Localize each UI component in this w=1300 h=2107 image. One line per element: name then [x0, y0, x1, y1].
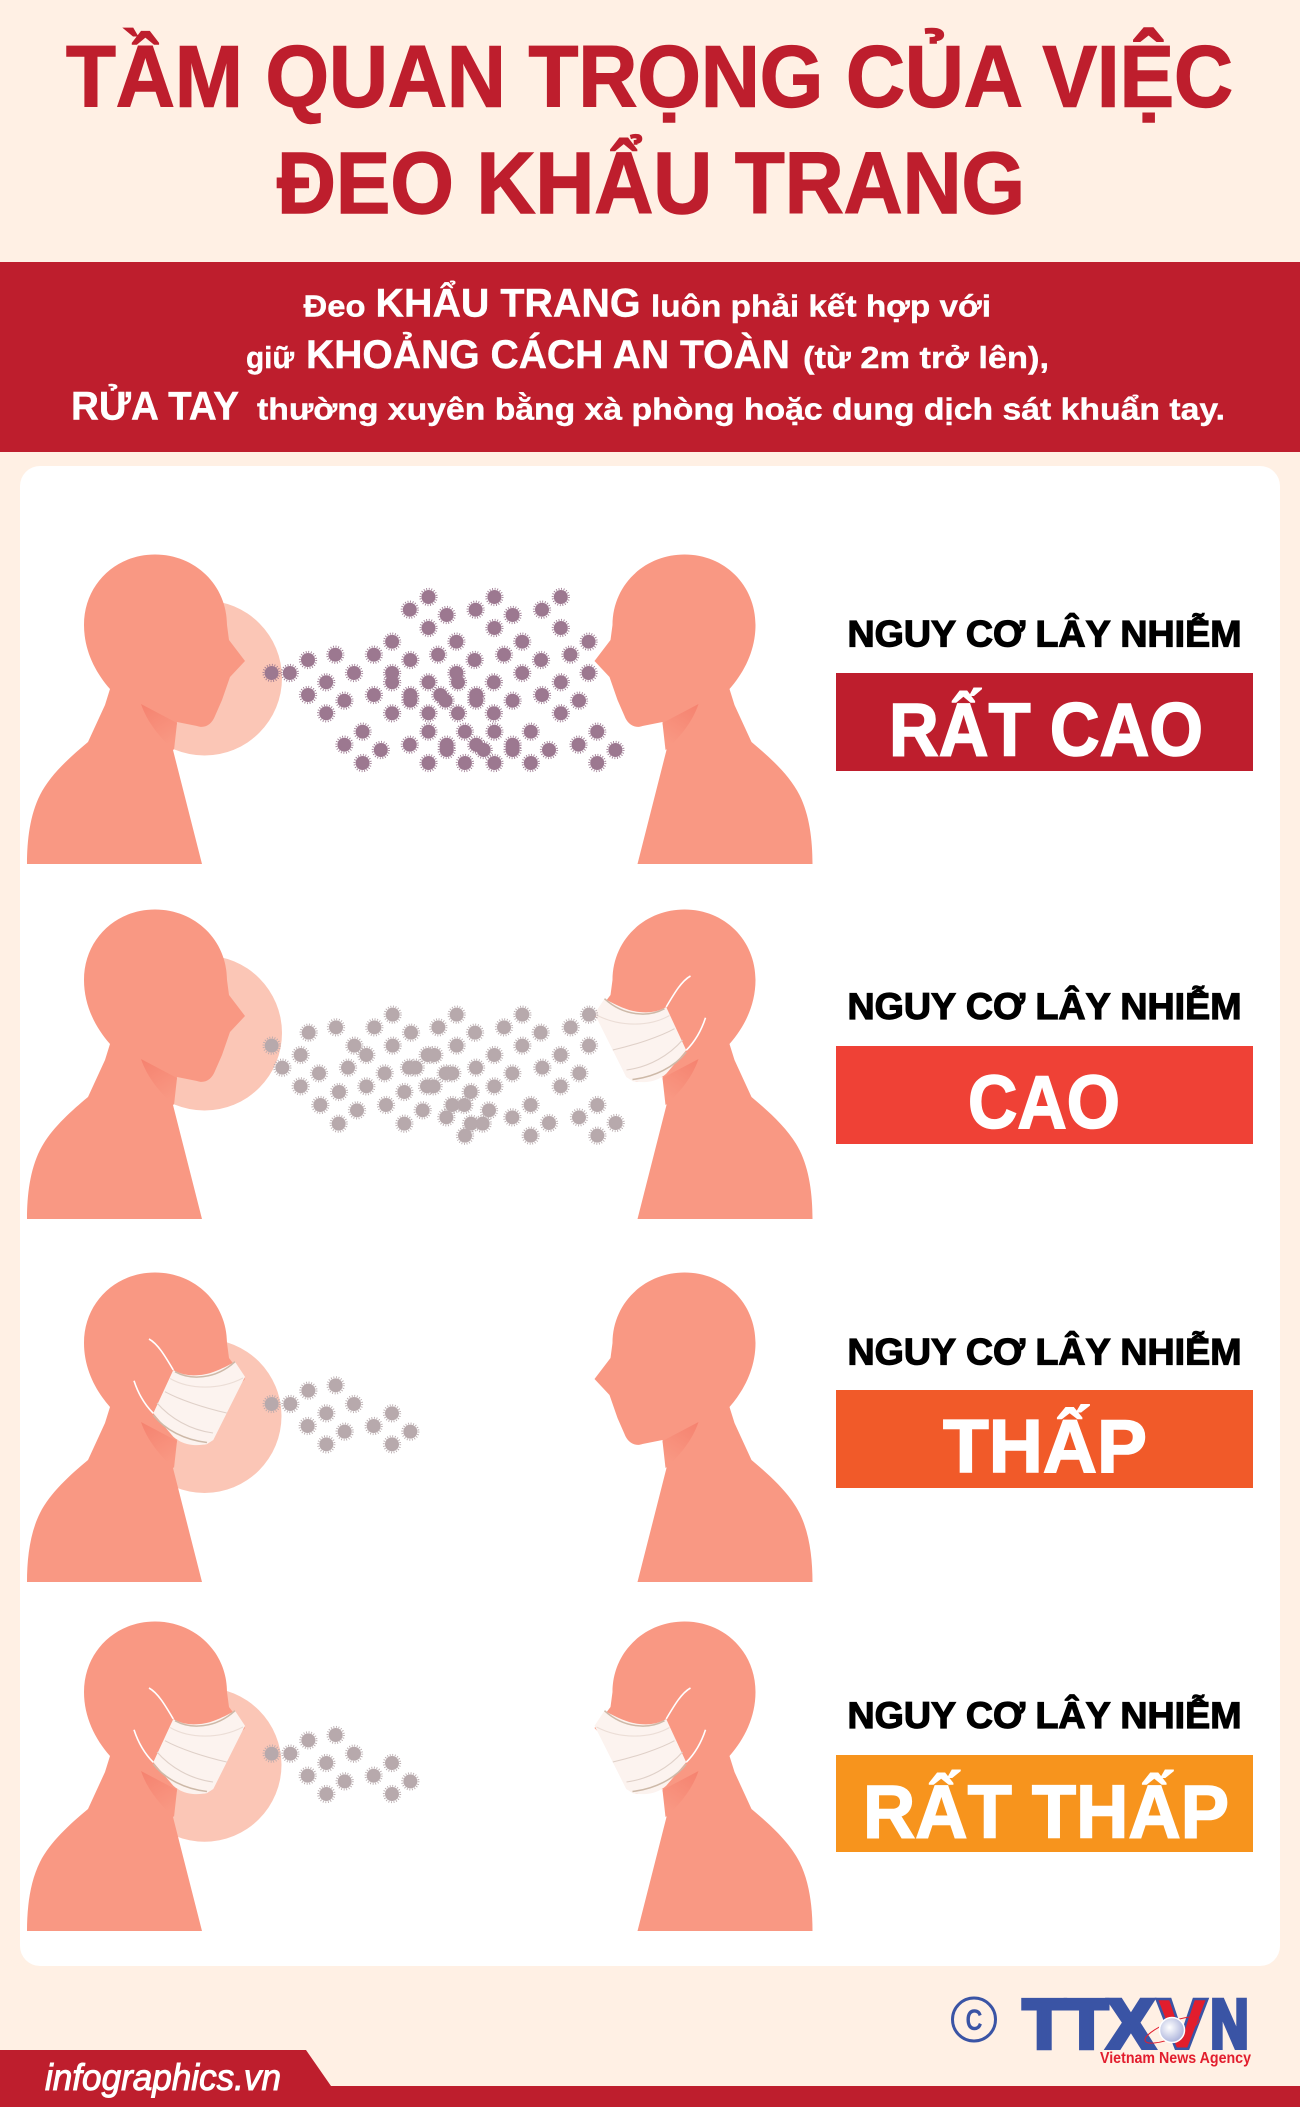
- footer bar: [0, 2050, 1300, 2107]
- right person with mask: [594, 910, 812, 1219]
- copyright mark: [952, 1998, 996, 2041]
- banner: key message: luôn phải kết hợp với: [651, 288, 991, 324]
- banner: key message: thường xuyên bằng xà phòng hoặc dung dịch sát khuẩn tay.: [257, 390, 1225, 426]
- virus cloud dense: [263, 589, 624, 771]
- banner: key message: KHẨU TRANG: [376, 278, 640, 326]
- banner: key message: RỬA TAY: [71, 382, 239, 428]
- row 4: both masked, very low risk: [27, 1622, 1253, 1931]
- right person with mask: [594, 1622, 812, 1931]
- risk box: very high: [836, 673, 1253, 772]
- footer site name: infographics.vn: [45, 2057, 281, 2098]
- virus cloud small: [263, 1727, 419, 1802]
- title: TẦM QUAN TRỌNG CỦA VIỆC: [66, 28, 1233, 126]
- wordmark: [1023, 1986, 1248, 2062]
- banner: key message: Đeo: [304, 288, 366, 324]
- breath circle: [127, 600, 282, 756]
- title: ĐEO KHẨU TRANG: [277, 135, 1025, 232]
- row 3: source masked, low risk: [27, 1272, 1253, 1582]
- wordmark: N: [1210, 1986, 1248, 2062]
- right person without mask: [594, 554, 812, 864]
- risk label: NGUY CƠ LÂY NHIỄM: [848, 1330, 1242, 1372]
- risk box: low: [836, 1390, 1253, 1488]
- wordmark: TTX: [1023, 1986, 1154, 2062]
- right person without mask: [594, 1272, 812, 1582]
- logo: TTXVN: [952, 1986, 1251, 2067]
- banner: key message: KHOẢNG CÁCH AN TOÀN: [306, 331, 790, 377]
- breath circle: [128, 1339, 282, 1493]
- risk label: NGUY CƠ LÂY NHIỄM: [848, 1694, 1242, 1736]
- virus cloud small: [263, 1377, 419, 1453]
- banner: key message: (từ 2m trở lên),: [803, 340, 1049, 375]
- risk label: NGUY CƠ LÂY NHIỄM: [848, 985, 1242, 1027]
- risk box: high: [836, 1046, 1253, 1144]
- row 1: no masks, very high risk: [27, 554, 1253, 864]
- virus cloud: [263, 1006, 624, 1144]
- left person without mask: [27, 910, 245, 1219]
- banner: key message: [0, 262, 1300, 452]
- risk label: NGUY CƠ LÂY NHIỄM: [848, 612, 1242, 654]
- risk box: very high: RẤT CAO: [889, 688, 1203, 772]
- copyright mark: C: [966, 2004, 982, 2037]
- left person with mask: [27, 1272, 245, 1582]
- breath circle: [128, 1688, 282, 1842]
- panel: risk levels: [20, 466, 1280, 1966]
- banner: key message: giữ: [246, 340, 295, 375]
- title: [66, 28, 1233, 232]
- risk box: very low: RẤT THẤP: [863, 1769, 1229, 1853]
- globe: [1142, 2012, 1202, 2048]
- left person with mask: [27, 1622, 245, 1931]
- breath circle: [127, 956, 282, 1110]
- agency name: Vietnam News Agency: [1100, 2050, 1251, 2067]
- row 2: receiver masked, high risk: [27, 910, 1253, 1219]
- risk box: low: THẤP: [943, 1404, 1147, 1488]
- wordmark: V: [1158, 1986, 1206, 2062]
- left person without mask: [27, 554, 245, 864]
- risk box: high: CAO: [968, 1060, 1120, 1144]
